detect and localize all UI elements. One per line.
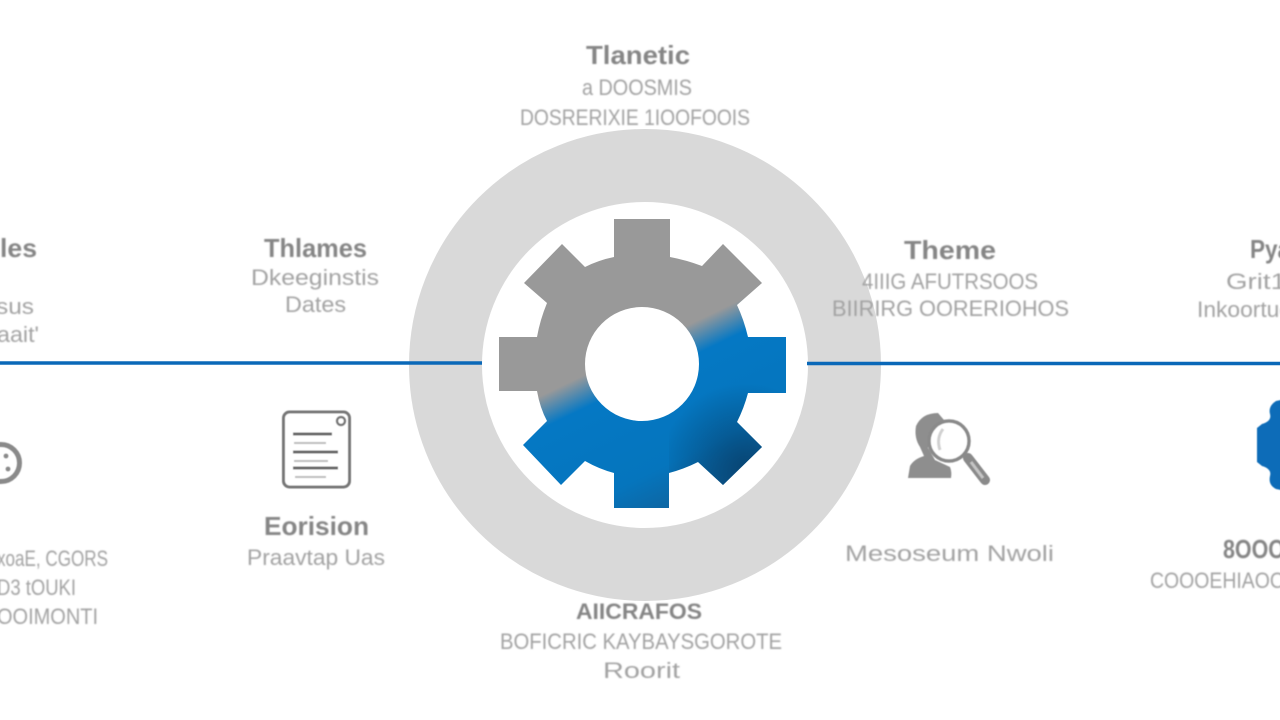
theme label block right <box>832 235 1069 321</box>
themes label block: Thlames <box>264 233 367 263</box>
icon: document <box>284 412 350 487</box>
horizontal timeline right <box>807 362 1280 365</box>
museum label: Mesoseum Nwoli <box>845 541 1054 566</box>
bottom label block: Roorit <box>603 658 680 683</box>
lower far left label block: xoaE, CGORS <box>0 546 108 571</box>
far left label block: les <box>0 233 37 263</box>
bottom label block: BOFICRIC KAYBAYSGOROTE <box>500 629 782 654</box>
top label block: Tlanetic <box>586 40 690 70</box>
outer grey ring <box>446 166 844 564</box>
far right label block: Grit1 <box>1226 269 1280 294</box>
top label block <box>520 40 750 130</box>
bottom label block: AIICRAFOS <box>576 599 702 624</box>
themes label block: Dates <box>285 292 346 317</box>
themes label block: Dkeeginstis <box>251 265 379 290</box>
theme label block right: BIIRIRG OORERIOHOS <box>832 296 1069 321</box>
themes label block <box>251 233 379 317</box>
theme label block right: 4IIIG AFUTRSOOS <box>862 269 1038 294</box>
horizontal timeline left <box>0 361 482 365</box>
lower far left label block: OOIMONTI <box>0 604 98 629</box>
far left label block <box>0 233 39 347</box>
decision label block <box>247 511 385 570</box>
icon: left dial, clipped <box>0 444 20 482</box>
top label block: a DOOSMIS <box>582 75 692 100</box>
theme label block right: Theme <box>904 235 996 265</box>
icon: person with magnifier <box>908 413 985 480</box>
bottom label block <box>500 599 782 683</box>
top label block: DOSRERIXIE 1IOOFOOIS <box>520 105 750 130</box>
lower far right label block <box>1150 534 1280 593</box>
decision label block: Eorision <box>264 511 369 541</box>
central gear icon <box>499 219 786 508</box>
lower far left label block <box>0 546 108 629</box>
far right label block <box>1197 234 1280 322</box>
decision label block: Praavtap Uas <box>247 545 385 570</box>
icon: blue gear, clipped <box>1257 398 1280 492</box>
